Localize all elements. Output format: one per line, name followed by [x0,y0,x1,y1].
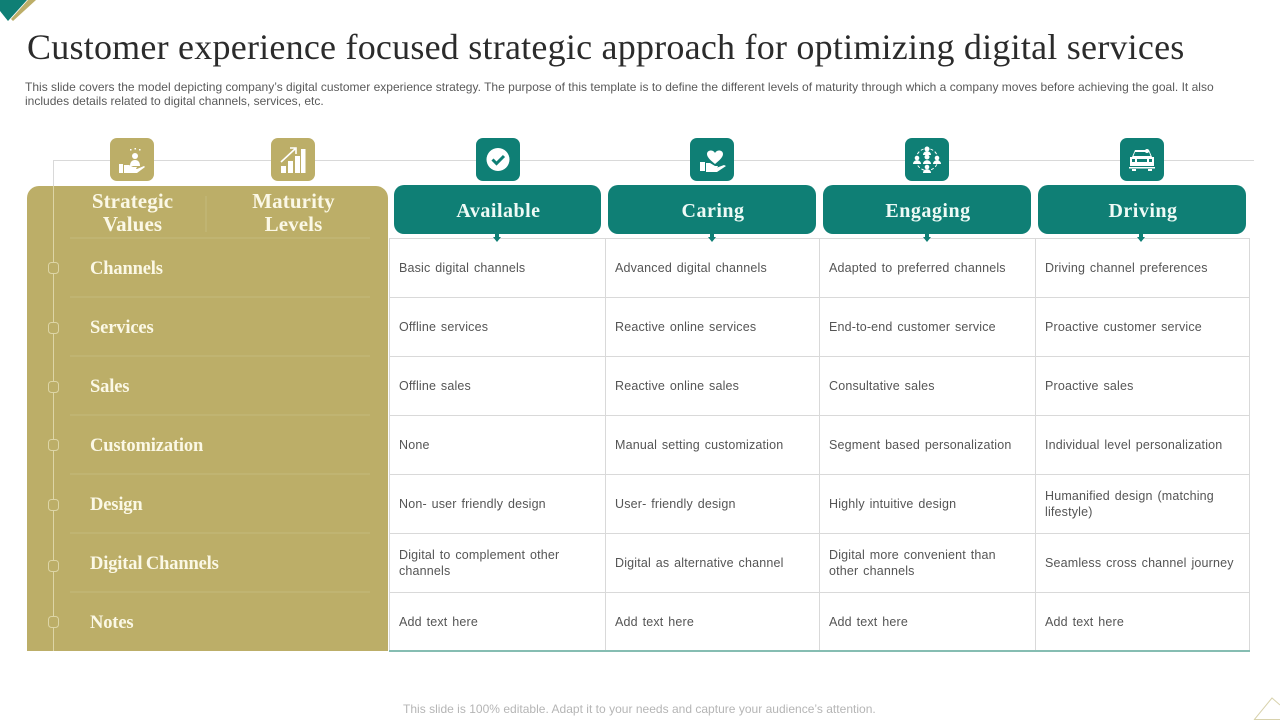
row: Sales [399,379,1134,393]
row: Digital Channels: Digital more convenient than [829,548,996,562]
description: This slide covers the model depicting company’s digital customer experience strategy. The purpose of this template is to define the different levels of maturity through which a company moves before achieving the goal. It also [25,80,1214,94]
column header: Available [394,185,601,234]
row: Digital Channels: Seamless cross channel journey [1045,556,1234,570]
row: Design: Humanified design (matching [1045,489,1214,503]
row: Notes: Add text here [829,615,908,629]
row: Customization: Manual setting customization [615,438,783,452]
row: Notes: Add text here [1045,615,1124,629]
row: Notes: Add text here [399,615,478,629]
heading: Maturity Levels: Maturity [252,189,335,213]
title: Customer experience focused strategic approach for optimizing digital services [27,27,1185,67]
row: Channels: Advanced digital channels [615,261,767,275]
row: Customization: Segment based personalization [829,438,1011,452]
heading: Strategic Values: Values [103,212,162,236]
corner decoration [0,0,36,21]
column header: Engaging: Engaging [885,200,971,222]
description: includes details related to digital channels, services, etc. [25,94,324,108]
row: Design: User- friendly design [615,497,736,511]
row label: Sales: Sales [90,377,129,397]
icon: connected people [905,138,949,181]
row label: Design: Design [90,495,143,515]
row: Channels [399,261,1208,275]
column header: Caring: Caring [682,200,744,222]
left panel [27,186,388,651]
row label: Customization: Customization [90,436,203,456]
row label: Digital Channels: Digital Channels [90,554,219,574]
row: Notes: Add text here [615,615,694,629]
row: Sales: Reactive online sales [615,379,739,393]
row: Services: Reactive online services [615,320,756,334]
column header: Engaging [823,185,1031,234]
row: Digital Channels: Digital to complement other [399,548,559,562]
row label: Channels: Channels [90,259,163,279]
row: Channels: Adapted to preferred channels [829,261,1006,275]
row: Channels: Basic digital channels [399,261,525,275]
row: Sales: Offline sales [399,379,471,393]
row: Design: lifestyle) [1045,505,1093,519]
heading: Maturity Levels: Levels [265,212,322,236]
column header: Driving [1038,185,1246,234]
row: Design [399,489,1214,519]
row: Customization [399,438,1222,452]
row: Services: Proactive customer service [1045,320,1202,334]
heading: Maturity Levels [252,189,335,236]
row: Design: Non- user friendly design [399,497,546,511]
footer note: This slide is 100% editable. Adapt it to your needs and capture your audience’s attention. [403,702,876,716]
row: Sales: Consultative sales [829,379,935,393]
row: Digital Channels [399,548,1234,578]
heading: Strategic Values: Strategic [92,189,173,213]
row: Services: End-to-end customer service [829,320,996,334]
description [25,80,1214,108]
icon: hand with heart [690,138,734,181]
row: Customization: None [399,438,430,452]
heading: Strategic Values [92,189,173,236]
icon: hand with person [110,138,154,181]
panel lines [48,186,370,651]
row: Sales: Proactive sales [1045,379,1134,393]
row: Digital Channels: Digital as alternative channel [615,556,784,570]
row: Digital Channels: channels [399,564,450,578]
column header: Available: Available [456,200,541,222]
row: Services: Offline services [399,320,488,334]
column header: Caring [608,185,816,234]
row: Customization: Individual level personalization [1045,438,1222,452]
icon: car [1120,138,1164,181]
row: Channels: Driving channel preferences [1045,261,1208,275]
row: Design: Highly intuitive design [829,497,956,511]
corner triangle [1254,697,1280,720]
row: Digital Channels: other channels [829,564,915,578]
row label: Notes: Notes [90,613,133,633]
column header: Driving: Driving [1108,200,1178,222]
row: Services [399,320,1202,334]
row label: Services: Services [90,318,154,338]
icon: check mark [476,138,520,181]
icon: growth chart [271,138,315,181]
row: Notes [399,615,1124,629]
